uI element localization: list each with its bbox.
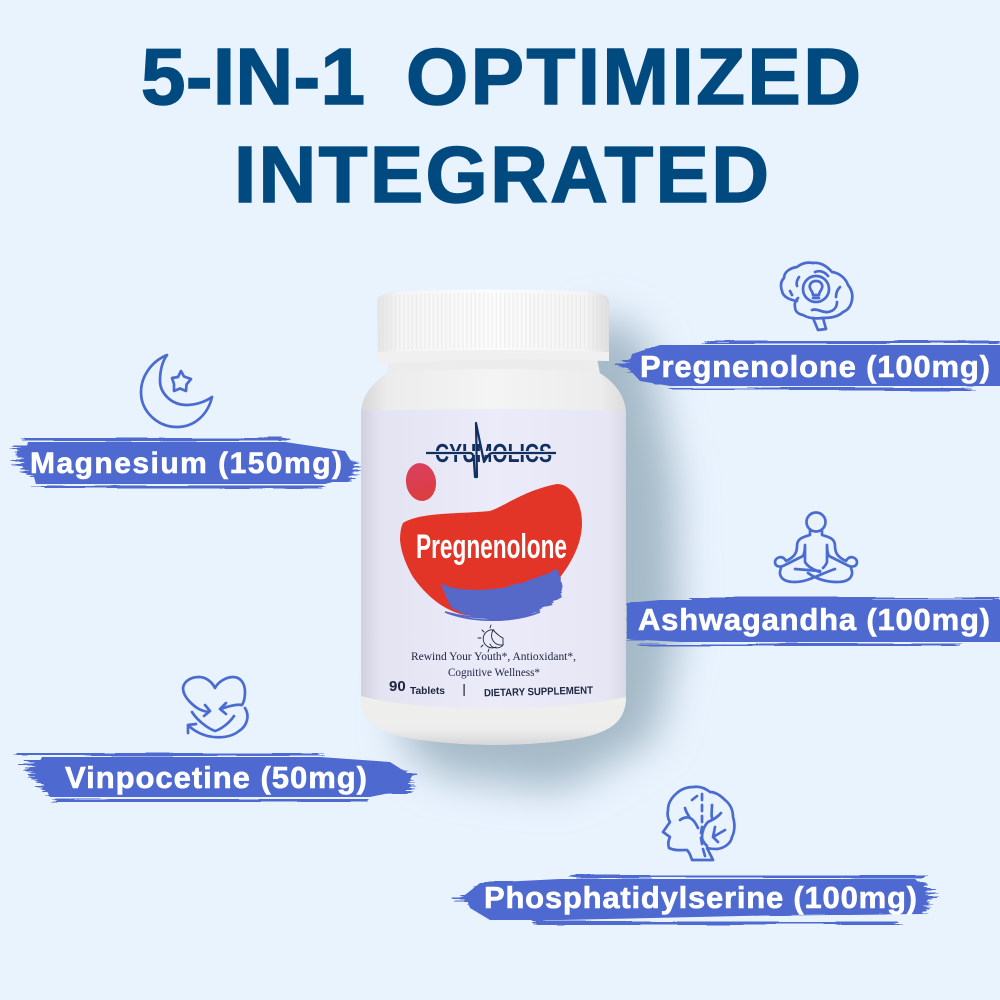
bottle cap (377, 290, 609, 364)
bottle body (361, 369, 626, 745)
brush bar (627, 597, 1000, 646)
brush bar (15, 438, 358, 488)
ingredient: Magnesium (15, 355, 358, 488)
icon: moon and star (141, 355, 212, 427)
red dot (404, 461, 438, 503)
label: Ashwagandha (100mg) (638, 602, 990, 637)
product name: Pregnenolone (416, 528, 567, 566)
icon: heart with arrows (183, 677, 247, 737)
title: 5-IN-1 (141, 32, 365, 121)
title: INTEGRATED (234, 130, 769, 219)
red paint blob (400, 484, 582, 617)
brush bar (20, 753, 415, 802)
brand logo (426, 423, 556, 477)
label: Magnesium (150mg) (30, 447, 342, 480)
title (141, 32, 861, 219)
tagline: Rewind Your Youth*, Antioxidant*, (411, 649, 576, 663)
blue paint stroke (441, 569, 562, 620)
bottle (361, 290, 626, 745)
tagline: Cognitive Wellness* (448, 665, 540, 679)
icon: brain with light bulb (781, 263, 852, 330)
divider (464, 684, 465, 696)
ingredient: Pregnenolone (618, 263, 1000, 390)
product label (361, 409, 626, 708)
tablet count (389, 678, 445, 697)
brand logo: CYUMOLICS (435, 438, 552, 468)
bottle neck (386, 358, 600, 374)
bottom reflection (361, 696, 626, 745)
label: Phosphatidylserine (100mg) (484, 880, 917, 915)
label: Pregnenolone (100mg) (640, 349, 990, 384)
tablet count: Tablets (410, 686, 445, 697)
tablet count: 90 (389, 678, 406, 695)
ingredient: Phosphatidylserine (456, 787, 932, 924)
title: OPTIMIZED (406, 32, 861, 121)
icon: head with brain pathway (663, 787, 734, 860)
brush bar (456, 875, 932, 924)
bottle shadow (400, 315, 678, 790)
icon: meditating figure (775, 512, 857, 582)
supplement line: DIETARY SUPPLEMENT (484, 685, 594, 699)
label: Vinpocetine (50mg) (65, 760, 367, 795)
brush bar (618, 341, 1000, 390)
ingredient: Vinpocetine (20, 677, 415, 802)
icon: sun and moon (478, 625, 503, 652)
tagline (411, 649, 576, 679)
ingredient: Ashwagandha (627, 512, 1000, 646)
